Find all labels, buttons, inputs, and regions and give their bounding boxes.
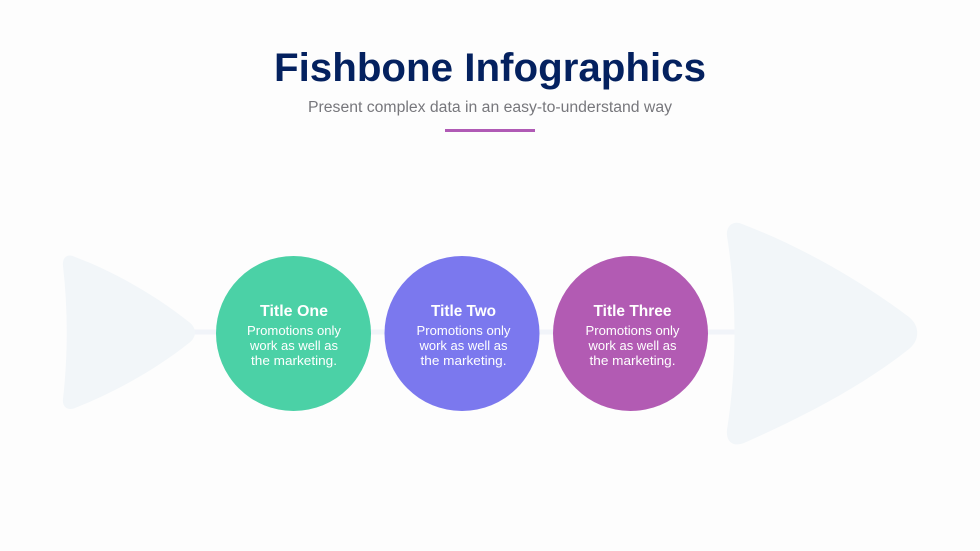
body text: title three: work as well as (588, 338, 677, 353)
body text: title two: the marketing. (420, 353, 506, 368)
heading: title three: Title Three (594, 303, 672, 320)
fish spine (190, 330, 735, 334)
fish head (727, 223, 917, 444)
body text: title two: work as well as (419, 338, 508, 353)
circle: title two (384, 256, 540, 411)
circle: title three (553, 256, 708, 411)
body text: title three: the marketing. (590, 353, 676, 368)
body text: title one: the marketing. (251, 353, 337, 368)
heading: title one: Title One (260, 303, 328, 320)
title accent underline (445, 129, 535, 132)
body text: title three: Promotions only (586, 323, 680, 338)
title: Fishbone Infographics (274, 46, 706, 90)
heading: title two: Title Two (431, 303, 496, 320)
circle: title one (216, 256, 371, 411)
body text: title one: work as well as (249, 338, 338, 353)
subtitle: Present complex data in an easy-to-understand way (308, 99, 672, 116)
body text: title one: Promotions only (247, 323, 341, 338)
body text: title two: Promotions only (416, 323, 511, 338)
fish tail (63, 255, 195, 409)
